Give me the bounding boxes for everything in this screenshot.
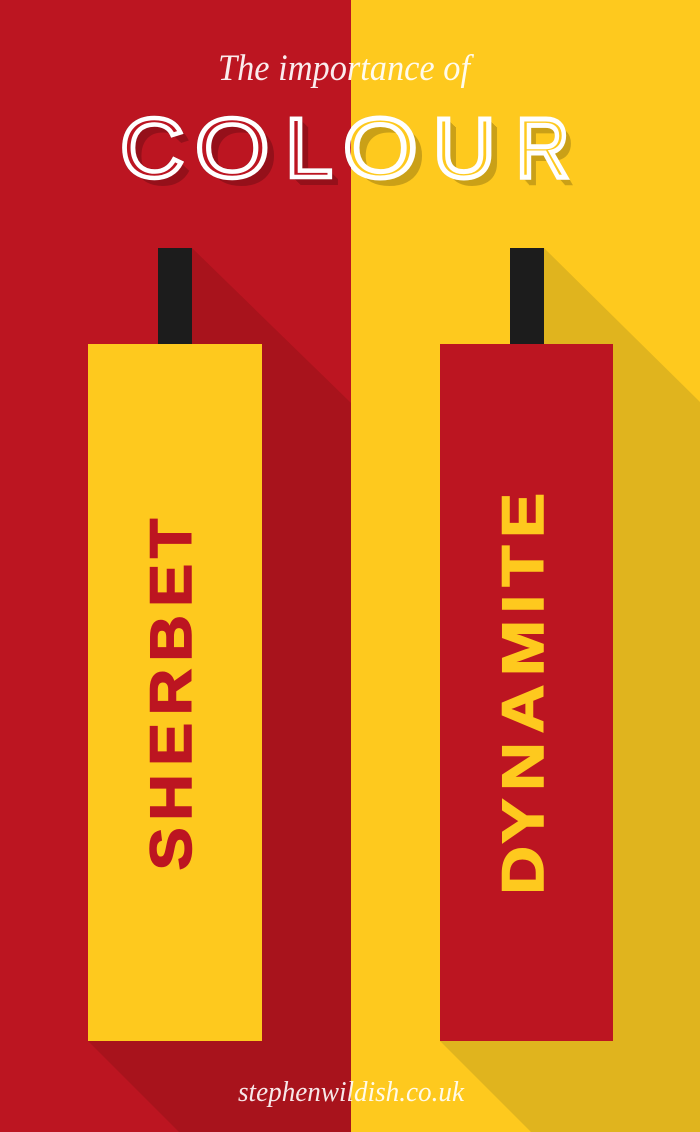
title shadow: U	[432, 101, 495, 195]
long shadow: dynamite tube	[440, 248, 700, 1132]
title shadow: L	[284, 101, 332, 195]
title shadow: R	[516, 101, 569, 195]
long shadow: sherbet tube	[88, 248, 351, 1132]
title: colour, yellow side: R	[516, 101, 569, 195]
title: colour, red side: C	[120, 101, 184, 195]
title: colour, red side: O	[342, 101, 417, 195]
tube: sherbet	[88, 344, 262, 1041]
fuse: sherbet	[158, 248, 192, 344]
title shadow: O	[194, 101, 269, 195]
panel: yellow right half	[351, 0, 700, 1132]
label: sherbet: SHERBET	[138, 519, 203, 870]
title: colour, yellow side	[351, 116, 570, 180]
fuse: dynamite	[510, 248, 544, 344]
tube: dynamite	[440, 344, 613, 1041]
title: colour, red side	[122, 116, 351, 180]
title: colour, red side: L	[284, 101, 332, 195]
title: colour, yellow side: O	[342, 101, 417, 195]
title: colour, yellow side: U	[432, 101, 495, 195]
title shadow: O	[342, 101, 417, 195]
title: colour, red side: O	[194, 101, 269, 195]
subtitle: The importance of	[218, 48, 474, 89]
title shadow: C	[120, 101, 184, 195]
panel: red left half	[0, 0, 351, 1132]
footer credit: stephenwildish.co.uk	[238, 1077, 465, 1108]
label: dynamite: DYNAMITE	[491, 493, 556, 895]
